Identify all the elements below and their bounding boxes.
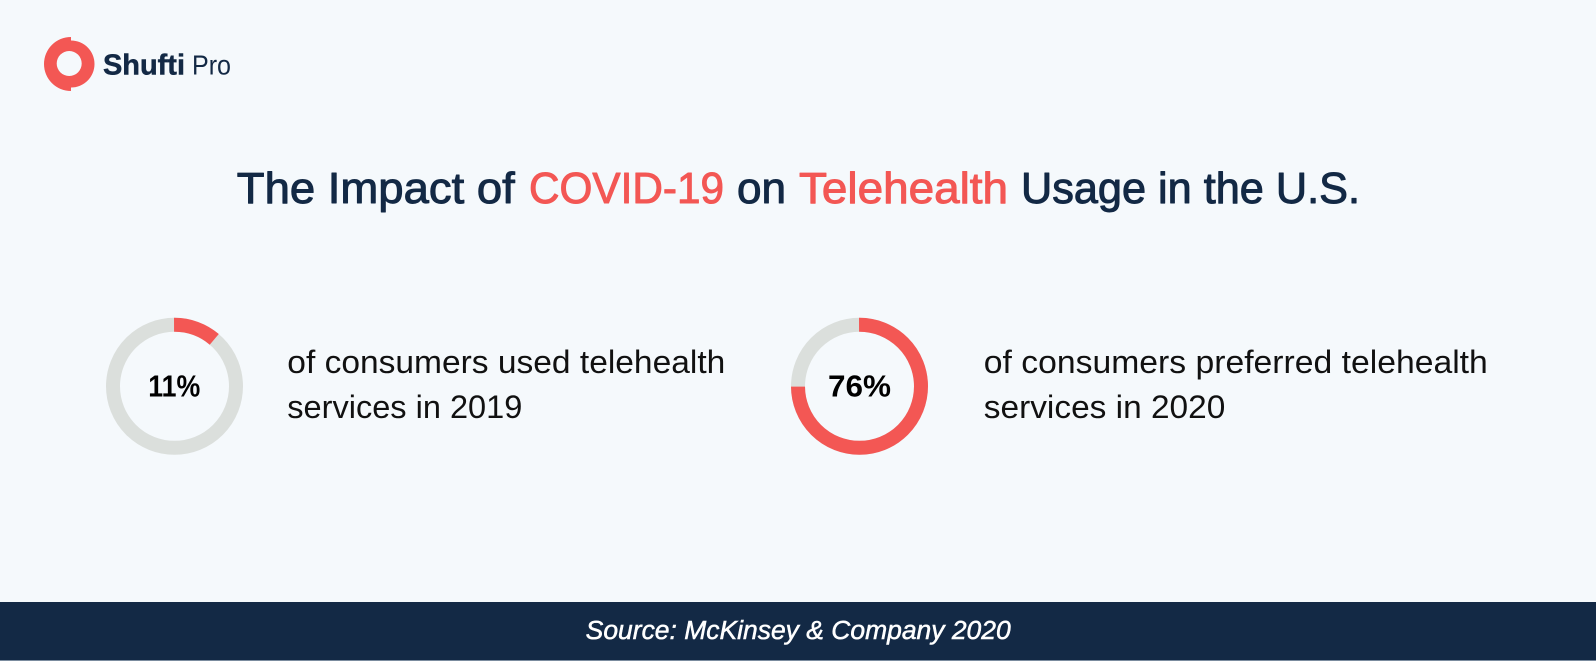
donut value: 76%: 76% (828, 369, 891, 404)
description: 2020: of consumers preferred telehealth (984, 344, 1488, 380)
title: Usage in the U.S. (1021, 164, 1360, 213)
description: 2020 (984, 344, 1488, 425)
icon: logo ring (44, 37, 94, 91)
description: 2019: services in 2019 (287, 389, 522, 425)
description: 2019 (287, 344, 725, 425)
description: 2020: services in 2020 (984, 389, 1225, 425)
logo wordmark: Pro (192, 49, 231, 80)
title: COVID-19 (529, 164, 724, 213)
donut chart: 76% (798, 325, 921, 448)
footer band (0, 602, 1596, 661)
source text: Source: McKinsey & Company 2020 (586, 617, 1011, 645)
title: Telehealth (799, 164, 1008, 213)
logo wordmark: Shufti (103, 49, 185, 81)
donut chart: 11% (113, 325, 236, 448)
description: 2019: of consumers used telehealth (287, 344, 725, 380)
logo wordmark (103, 49, 231, 81)
donut value: 11%: 11% (148, 369, 200, 404)
logo: Shufti Pro (44, 37, 231, 91)
panel: 2020 statistic (798, 325, 1488, 448)
title: The Impact of (237, 164, 516, 213)
title: on (737, 164, 786, 213)
panel: 2019 statistic (113, 325, 725, 448)
title (237, 164, 1360, 213)
